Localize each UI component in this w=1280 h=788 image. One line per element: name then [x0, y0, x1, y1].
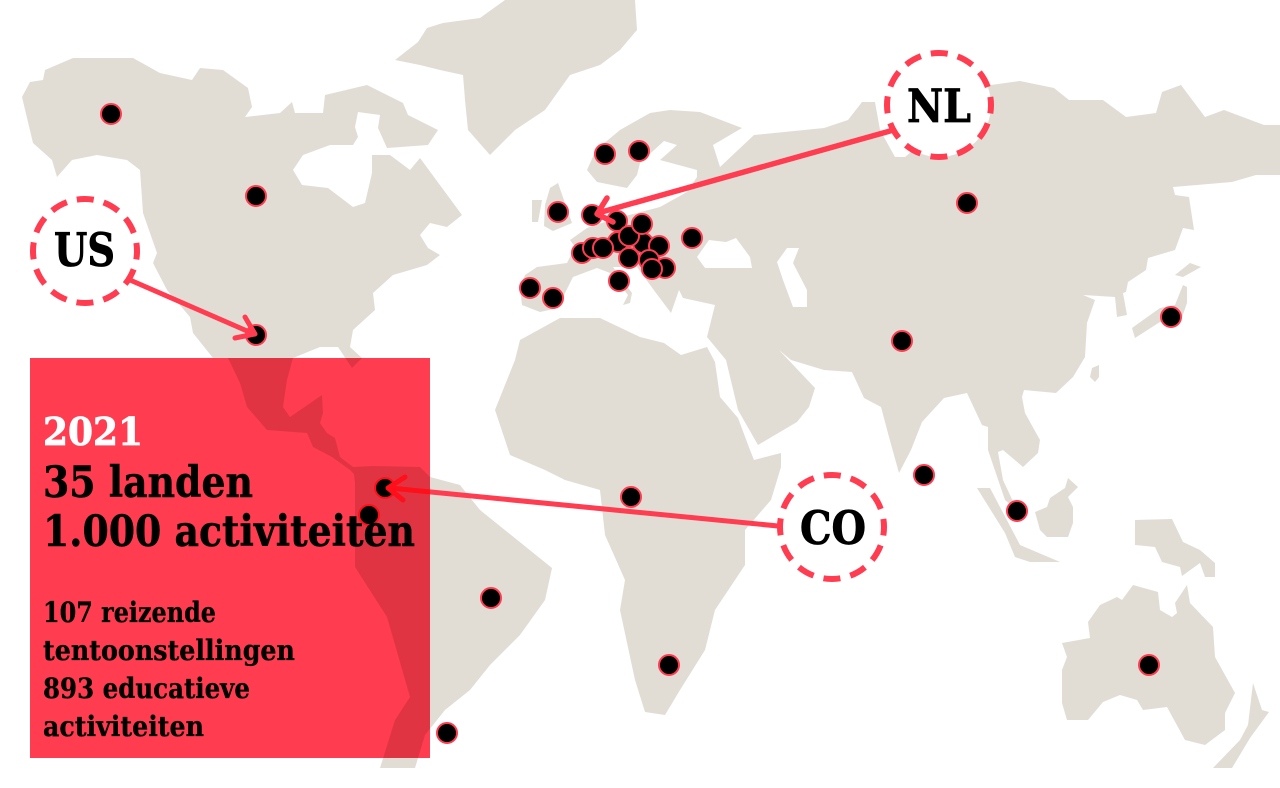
arrow: US to United States [130, 280, 255, 338]
badge: US [33, 199, 137, 303]
Great Britain [544, 183, 572, 231]
Black Sea [697, 238, 752, 268]
New Zealand [1213, 683, 1269, 768]
South America [353, 466, 552, 768]
Sakhalin [1175, 263, 1201, 277]
arrow: NL to Netherlands [597, 131, 890, 222]
Africa [495, 318, 781, 715]
badge: CO: CO [800, 501, 866, 555]
North and Central America [22, 58, 462, 480]
panel: 2021 key figures [30, 358, 430, 758]
badge: NL: NL [907, 79, 971, 133]
detail: educational activities continued: activiteiten [43, 710, 204, 743]
Greenland [395, 0, 637, 155]
activities count: 1.000 activiteiten [43, 507, 415, 557]
badge: US: US [54, 223, 115, 277]
Caspian Sea [777, 248, 807, 307]
countries count: 35 landen [43, 458, 253, 508]
Borneo [1035, 478, 1078, 537]
Japan [1132, 285, 1187, 338]
panel text [43, 409, 415, 743]
Australia [1062, 585, 1235, 745]
Ireland [532, 200, 542, 222]
detail: travelling exhibitions continued: tentoonstellingen [43, 634, 295, 667]
year heading: 2021 [43, 409, 143, 454]
detail: educational activities: 893 educatieve [43, 672, 250, 705]
Taiwan [1090, 365, 1099, 382]
arrow: CO to Colombia [388, 477, 778, 526]
badge: CO [780, 475, 884, 579]
Sumatra and Java [977, 488, 1060, 562]
badge: NL [887, 53, 991, 157]
detail: travelling exhibitions: 107 reizende [43, 596, 216, 629]
Eurasia [520, 81, 1280, 510]
New Guinea [1135, 519, 1215, 577]
location markers [101, 104, 1181, 743]
